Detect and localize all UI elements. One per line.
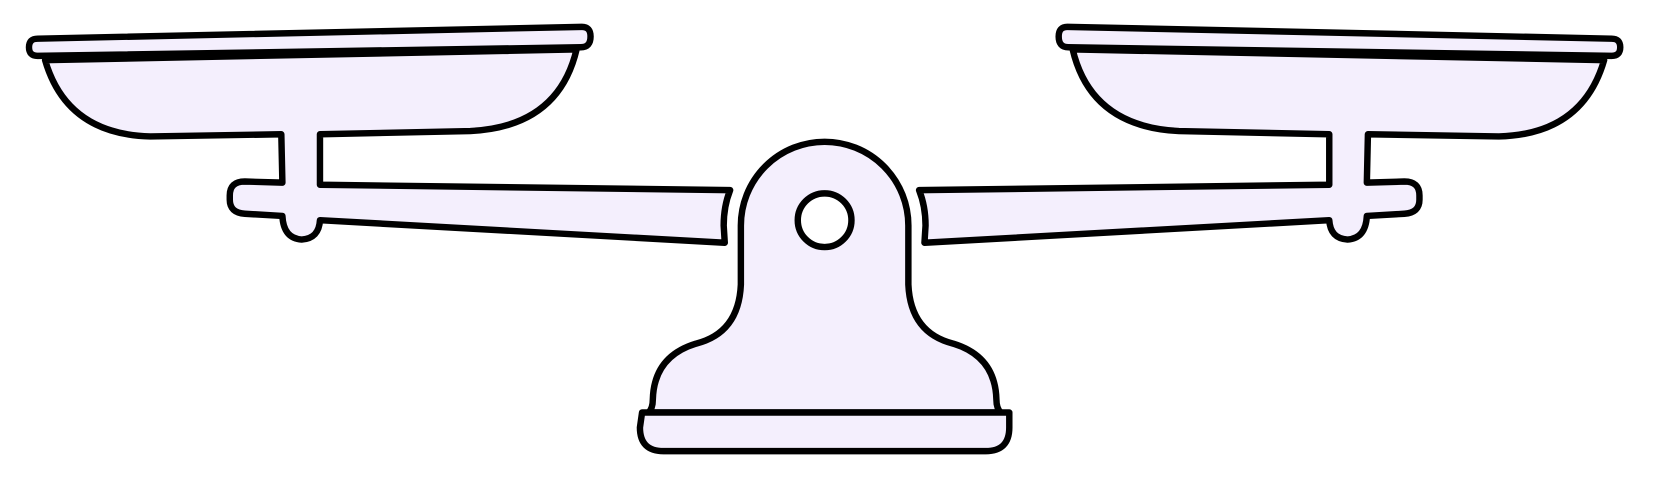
base plate xyxy=(640,412,1009,451)
right pan rim xyxy=(1059,27,1620,56)
right arm with pan xyxy=(919,27,1620,243)
pivot hole xyxy=(798,193,851,247)
left pan rim xyxy=(29,27,591,56)
left arm with pan xyxy=(29,27,730,243)
central stand xyxy=(649,142,1001,412)
left beam xyxy=(45,49,730,243)
